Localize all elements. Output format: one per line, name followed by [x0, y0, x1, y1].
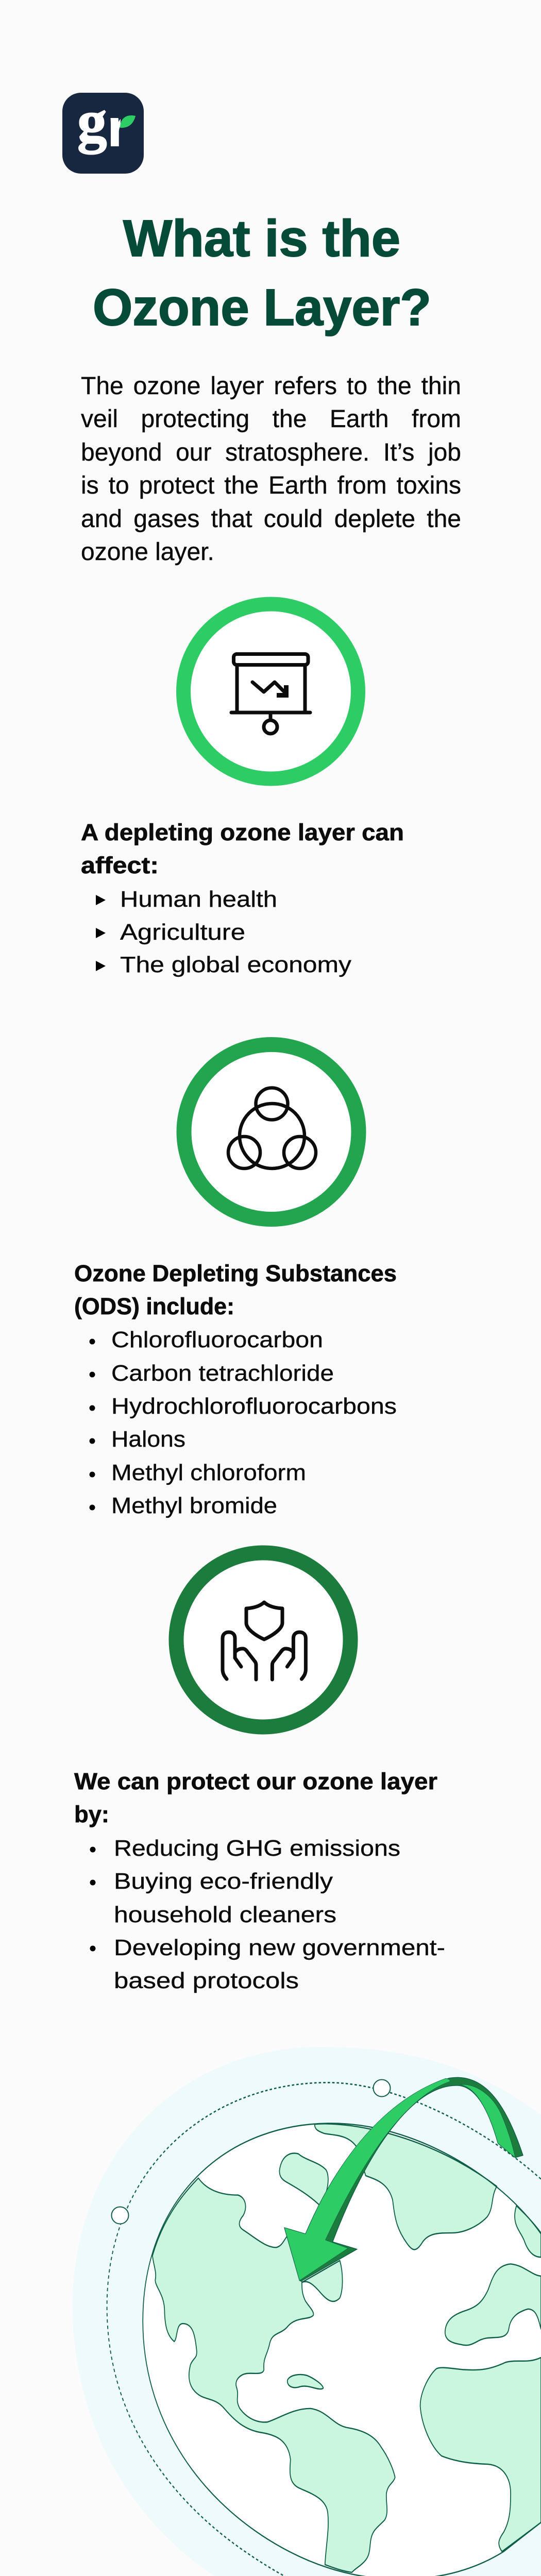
intro paragraph	[81, 372, 461, 566]
intro paragraph: beyond our stratosphere. It’s job	[81, 439, 461, 466]
heading: depleting effects: A depleting ozone layer can	[81, 819, 404, 845]
title	[93, 210, 431, 336]
list: substances	[90, 1327, 397, 1518]
list: affected areas: The global economy	[120, 952, 351, 977]
heading: depleting effects	[81, 819, 404, 878]
list: protection actions: Reducing GHG emissions	[114, 1836, 400, 1861]
list: affected areas: Human health	[120, 887, 277, 912]
heading: protection: by:	[74, 1801, 109, 1827]
heading: ODS	[74, 1260, 397, 1319]
illustration: globe with orbit and arrow	[73, 2047, 541, 2576]
orbit markers	[111, 2079, 529, 2576]
icon: three linked circles	[184, 1045, 359, 1219]
title: What is the	[123, 210, 400, 267]
list: protection actions	[90, 1836, 445, 1993]
list: affected areas	[96, 887, 351, 977]
logo: gr app icon: g	[77, 89, 107, 154]
intro paragraph: is to protect the Earth from toxins	[81, 472, 461, 499]
icon: hands protecting shield	[176, 1553, 350, 1727]
logo: gr app icon	[62, 89, 144, 174]
logo: gr app icon: r	[108, 99, 128, 157]
list: substances: Halons	[111, 1427, 185, 1452]
list: protection actions: household cleaners	[114, 1902, 336, 1927]
list: protection actions: based protocols	[114, 1968, 299, 1993]
intro paragraph: ozone layer.	[81, 538, 214, 566]
heading: protection	[74, 1768, 437, 1827]
list: substances: Carbon tetrachloride	[111, 1361, 334, 1386]
heading: ODS: (ODS) include:	[74, 1293, 234, 1319]
title: Ozone Layer?	[93, 279, 431, 336]
intro paragraph: The ozone layer refers to the thin	[81, 372, 461, 400]
section: ozone depleting substances	[74, 1260, 397, 1518]
list: substances: Chlorofluorocarbon	[111, 1327, 323, 1352]
icon: presentation screen with falling trend	[183, 604, 358, 779]
list: substances: Hydrochlorofluorocarbons	[111, 1394, 397, 1419]
section: how to protect the ozone layer	[74, 1768, 445, 1993]
list: substances: Methyl bromide	[111, 1493, 277, 1518]
atmosphere halo	[73, 2047, 541, 2576]
globe	[107, 2082, 541, 2576]
list: protection actions: Developing new government-	[114, 1935, 445, 1960]
list: protection actions: Buying eco-friendly	[114, 1869, 333, 1894]
intro paragraph: and gases that could deplete the	[81, 505, 461, 533]
intro paragraph: veil protecting the Earth from	[81, 405, 461, 433]
heading: ODS: Ozone Depleting Substances	[74, 1260, 397, 1286]
section: a depleting ozone layer can affect	[81, 819, 404, 977]
arrow	[284, 2077, 523, 2281]
heading: protection: We can protect our ozone layer	[74, 1768, 437, 1794]
list: affected areas: Agriculture	[120, 920, 245, 945]
list: substances: Methyl chloroform	[111, 1460, 306, 1485]
heading: depleting effects: affect:	[81, 852, 159, 878]
